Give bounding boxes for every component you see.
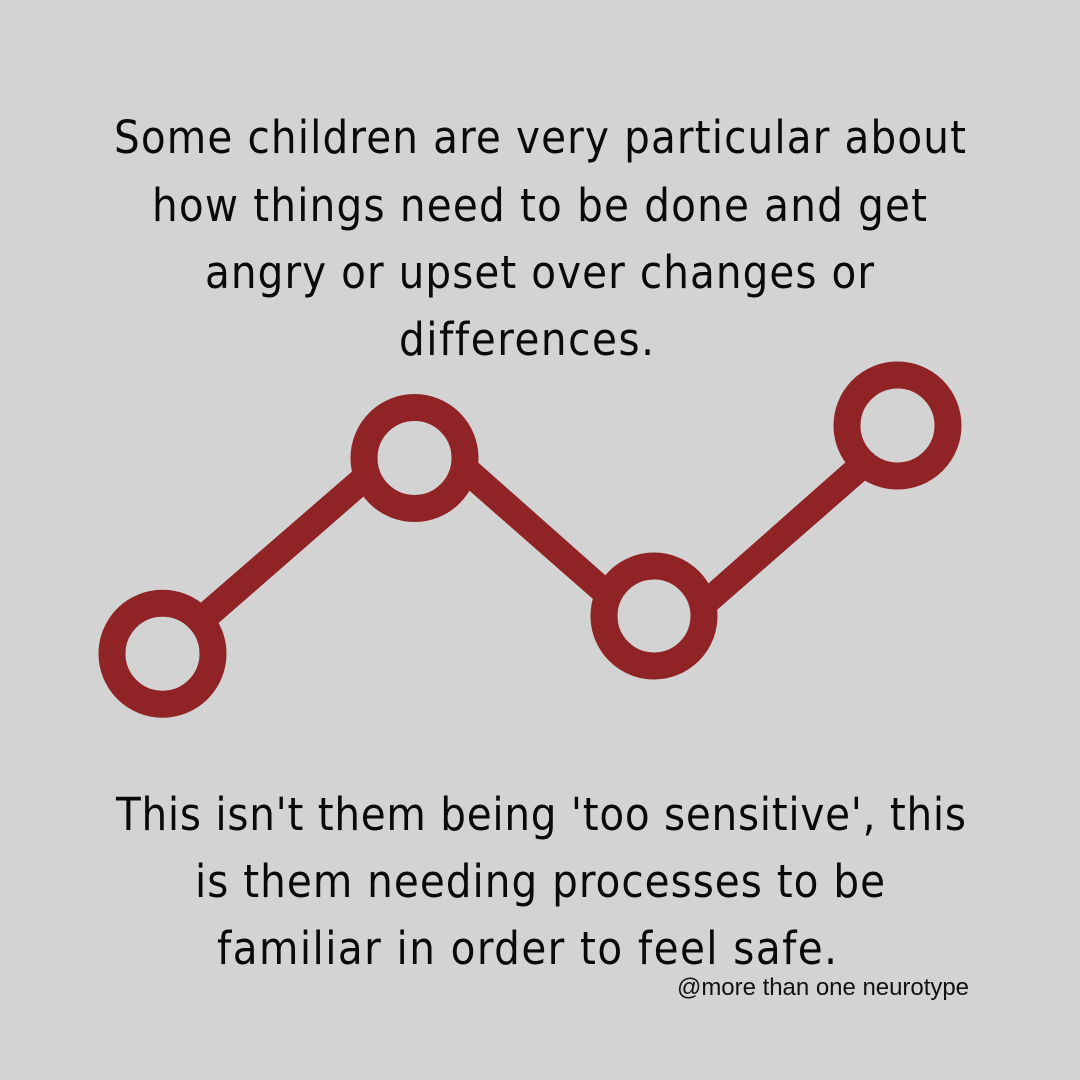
line chart icon — [112, 375, 948, 704]
top text block: how things need to be done and get — [152, 179, 927, 232]
bottom text block: This isn't them being 'too sensitive', this — [115, 788, 966, 841]
top text block: angry or upset over changes or — [205, 246, 874, 299]
bottom text block: is them needing processes to be — [195, 855, 885, 908]
top text block: Some children are very particular about — [114, 111, 966, 164]
top text block: differences. — [399, 313, 654, 366]
bottom text block: familiar in order to feel safe. — [217, 922, 837, 975]
credit: @more than one neurotype — [677, 974, 969, 1001]
bottom text block — [115, 788, 966, 975]
top text block — [114, 111, 966, 366]
